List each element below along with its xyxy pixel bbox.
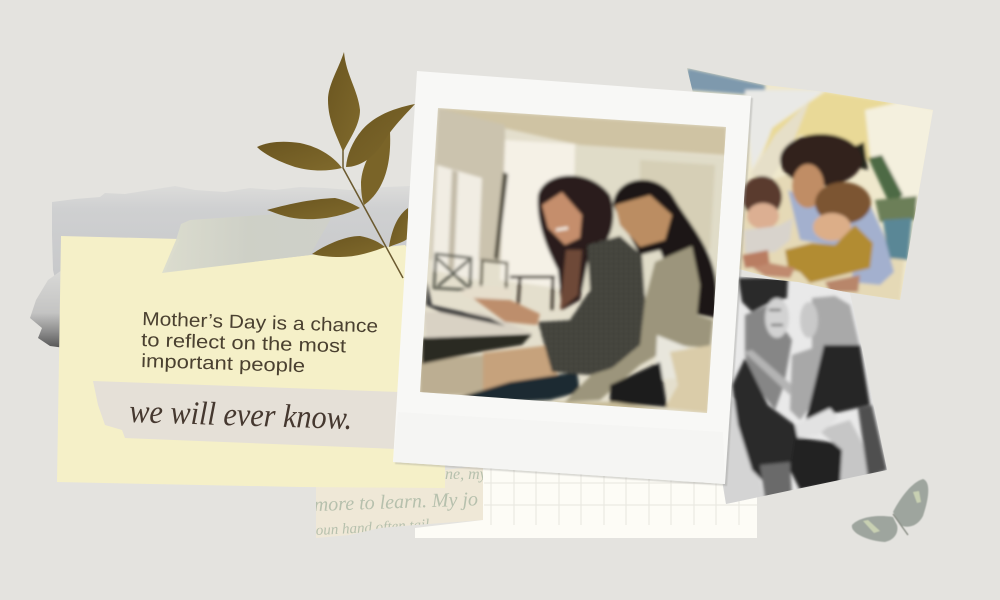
- left wing: [852, 516, 897, 542]
- photo: family in tent: [687, 68, 933, 300]
- handwritten letter scrap: ne, my: [445, 466, 488, 483]
- child hair: [812, 296, 860, 350]
- polaroid photo: mother and daughter: [415, 100, 735, 420]
- right wing: [893, 479, 928, 527]
- dark table: [422, 334, 532, 364]
- mother's sweater: [538, 236, 645, 375]
- butterfly: [852, 479, 928, 542]
- black folder: [806, 345, 870, 420]
- handwritten letter scrap: [313, 465, 488, 539]
- mother's face: [542, 192, 582, 245]
- daughter's face: [615, 195, 672, 247]
- striped cushion: [655, 335, 687, 380]
- graduate face: [765, 298, 789, 338]
- jeans: [457, 372, 580, 402]
- dried leaf branch: [257, 52, 415, 278]
- legs: [868, 155, 903, 205]
- grid note paper: [415, 468, 757, 538]
- body text: Mother’s Day is a chance: [142, 309, 378, 337]
- leaf upper right: [346, 104, 415, 167]
- far wall: [575, 145, 726, 300]
- body text: important people: [141, 351, 305, 377]
- girl shirt: [744, 218, 793, 253]
- mother face: [792, 164, 824, 208]
- body text: to reflect on the most: [141, 330, 347, 357]
- stem: [343, 150, 403, 278]
- boy hair: [815, 182, 871, 224]
- girl hair: [742, 176, 782, 218]
- torn grey watercolor paper: [30, 186, 410, 348]
- leaf lower left: [312, 236, 385, 257]
- side table: [510, 277, 555, 310]
- translucent washi tape: [162, 210, 336, 273]
- body: [893, 514, 908, 535]
- child leg: [818, 420, 868, 482]
- graduation cap: [738, 277, 788, 312]
- polaroid frame: [393, 71, 753, 486]
- daughter's sweater: [565, 246, 713, 402]
- girl face: [747, 203, 779, 229]
- body text: [141, 309, 378, 377]
- window centre: [500, 140, 575, 290]
- leaf top: [328, 52, 360, 152]
- grey torn banner: [93, 381, 400, 449]
- lower skirt: [722, 400, 765, 506]
- mother's hair: [538, 175, 613, 310]
- bowl: [461, 286, 513, 300]
- handwritten letter scrap: oun hand often tail: [315, 517, 430, 539]
- floor: [483, 345, 560, 392]
- scrap of blue photo: [687, 68, 765, 96]
- papers: [424, 312, 533, 338]
- leaf lower right: [389, 208, 408, 247]
- script tagline: we will ever know.: [129, 394, 353, 437]
- leaf left: [257, 142, 342, 171]
- wing spots: [863, 491, 921, 533]
- boy face: [813, 213, 851, 241]
- boy sweater: [785, 225, 873, 283]
- yellow note card: [57, 236, 445, 488]
- lavender sweater: [788, 190, 894, 285]
- window left: [432, 165, 482, 280]
- ceiling: [438, 108, 726, 155]
- wheelchair: [790, 437, 850, 490]
- dining chairs: [434, 254, 471, 290]
- mother hair: [780, 134, 862, 186]
- leaf mid left: [267, 198, 360, 219]
- dark lap: [610, 362, 667, 407]
- hands: [742, 250, 770, 268]
- cream sofa: [665, 345, 712, 413]
- gown: [732, 358, 800, 488]
- handwritten letter scrap: more to learn. My jo: [313, 488, 478, 516]
- leaf middle: [361, 132, 390, 205]
- left wall: [430, 108, 505, 260]
- hand: [795, 408, 838, 438]
- child face: [800, 302, 818, 338]
- long hair: [745, 305, 792, 410]
- photo: graduate with child, black and white: [720, 272, 890, 507]
- laptop: [426, 282, 505, 326]
- hands: [473, 298, 540, 325]
- daughter's hair: [613, 180, 717, 318]
- child shirt: [790, 344, 825, 420]
